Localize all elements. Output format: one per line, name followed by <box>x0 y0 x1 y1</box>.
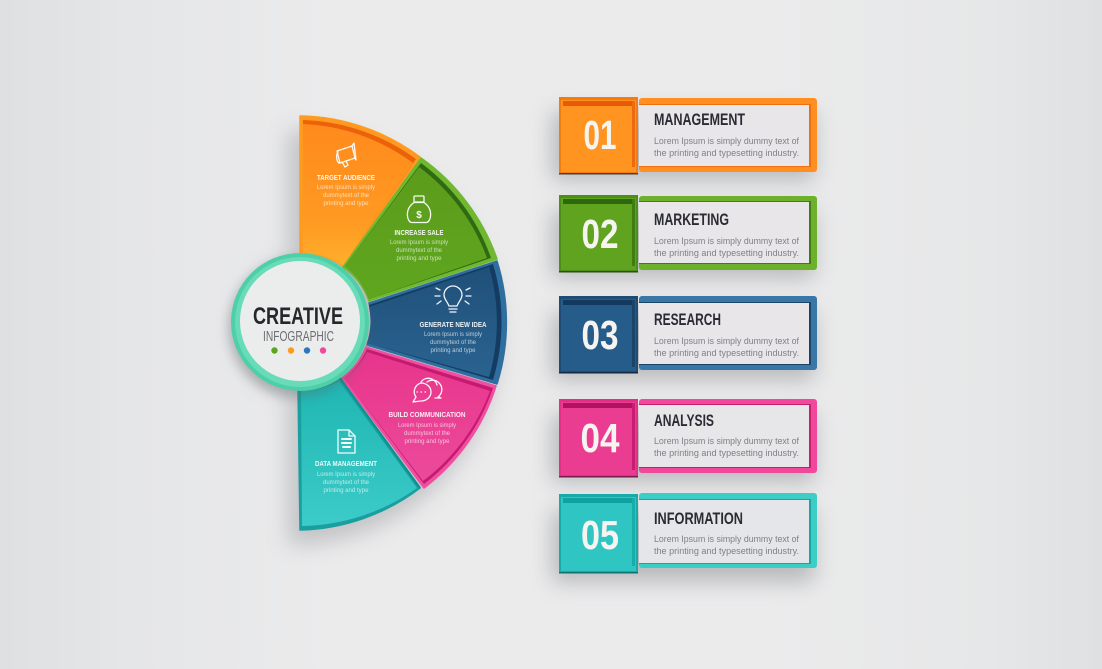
text: generate new idea: printing and type <box>430 347 476 354</box>
heading: ANALYSIS <box>654 412 714 430</box>
text: data management: dummytext of the <box>323 479 369 486</box>
body text: Lorem Ipsum is simply dummy text of <box>654 136 799 147</box>
number: 01 <box>584 112 616 158</box>
text: data management <box>317 471 376 494</box>
text: build communication <box>398 422 457 445</box>
number: 05 <box>581 512 619 558</box>
subtitle: infographic: INFOGRAPHIC <box>263 329 334 345</box>
body text <box>654 436 799 459</box>
body text: Lorem Ipsum is simply dummy text of <box>654 436 799 447</box>
text: build communication: dummytext of the <box>404 430 450 437</box>
icon: money bag: $ <box>416 210 422 221</box>
text: target audience: dummytext of the <box>323 192 369 199</box>
shadow: semicircle chart <box>237 130 498 545</box>
slice: generate new idea <box>367 261 506 384</box>
card 01: management <box>559 97 817 174</box>
text: generate new idea: Lorem Ipsum is simply <box>424 331 483 338</box>
card 04: analysis <box>559 399 817 478</box>
body text <box>654 336 799 359</box>
body text: the printing and typesetting industry. <box>654 448 799 459</box>
text: increase sale: Lorem Ipsum is simply <box>390 239 449 246</box>
heading: INFORMATION <box>654 510 743 528</box>
title: creative: CREATIVE <box>253 303 343 330</box>
icon: megaphone <box>337 143 356 167</box>
icon: document <box>338 430 355 453</box>
text: target audience: printing and type <box>324 200 369 207</box>
body text <box>654 136 799 159</box>
icon: light bulb <box>435 286 471 312</box>
text: target audience <box>317 184 376 207</box>
text: increase sale: printing and type <box>396 255 442 262</box>
text: build communication: Lorem Ipsum is simply <box>398 422 457 429</box>
text: generate new idea: dummytext of the <box>430 339 476 346</box>
number: 04 <box>580 415 620 461</box>
heading: MARKETING <box>654 211 729 229</box>
icon: money bag <box>407 196 431 222</box>
label: increase sale: INCREASE SALE <box>394 228 444 237</box>
text: build communication: printing and type <box>404 438 450 445</box>
heading: MANAGEMENT <box>654 111 745 129</box>
body text <box>654 236 799 259</box>
text: data management: printing and type <box>324 487 369 494</box>
card 02: marketing <box>559 195 817 272</box>
body text: the printing and typesetting industry. <box>654 546 799 557</box>
body text <box>654 534 799 557</box>
body text: Lorem Ipsum is simply dummy text of <box>654 534 799 545</box>
body text: the printing and typesetting industry. <box>654 348 799 359</box>
slice: data management <box>298 378 420 530</box>
label: generate new idea: GENERATE NEW IDEA <box>420 320 487 329</box>
icon: chat bubbles <box>413 378 442 402</box>
label: data management: DATA MANAGEMENT <box>315 459 377 468</box>
card 05: information <box>559 493 817 574</box>
label: build communication: BUILD COMMUNICATION <box>388 410 466 419</box>
text: target audience: Lorem Ipsum is simply <box>317 184 376 191</box>
body text: the printing and typesetting industry. <box>654 248 799 259</box>
text: increase sale: dummytext of the <box>396 247 442 254</box>
dots <box>271 347 326 354</box>
label: target audience: TARGET AUDIENCE <box>317 173 375 182</box>
card 03: research <box>559 296 817 374</box>
body text: the printing and typesetting industry. <box>654 148 799 159</box>
slice: increase sale <box>343 158 497 301</box>
slice: build communication <box>342 347 496 488</box>
body text: Lorem Ipsum is simply dummy text of <box>654 336 799 347</box>
text: data management: Lorem Ipsum is simply <box>317 471 376 478</box>
heading: RESEARCH <box>654 311 721 329</box>
slice: target audience <box>300 116 420 266</box>
number: 02 <box>582 211 618 257</box>
semicircle chart <box>298 116 506 530</box>
center circle <box>228 253 369 398</box>
text: increase sale <box>390 239 449 262</box>
number: 03 <box>582 312 618 358</box>
text: generate new idea <box>424 331 483 354</box>
shadow: cards <box>552 112 814 582</box>
body text: Lorem Ipsum is simply dummy text of <box>654 236 799 247</box>
